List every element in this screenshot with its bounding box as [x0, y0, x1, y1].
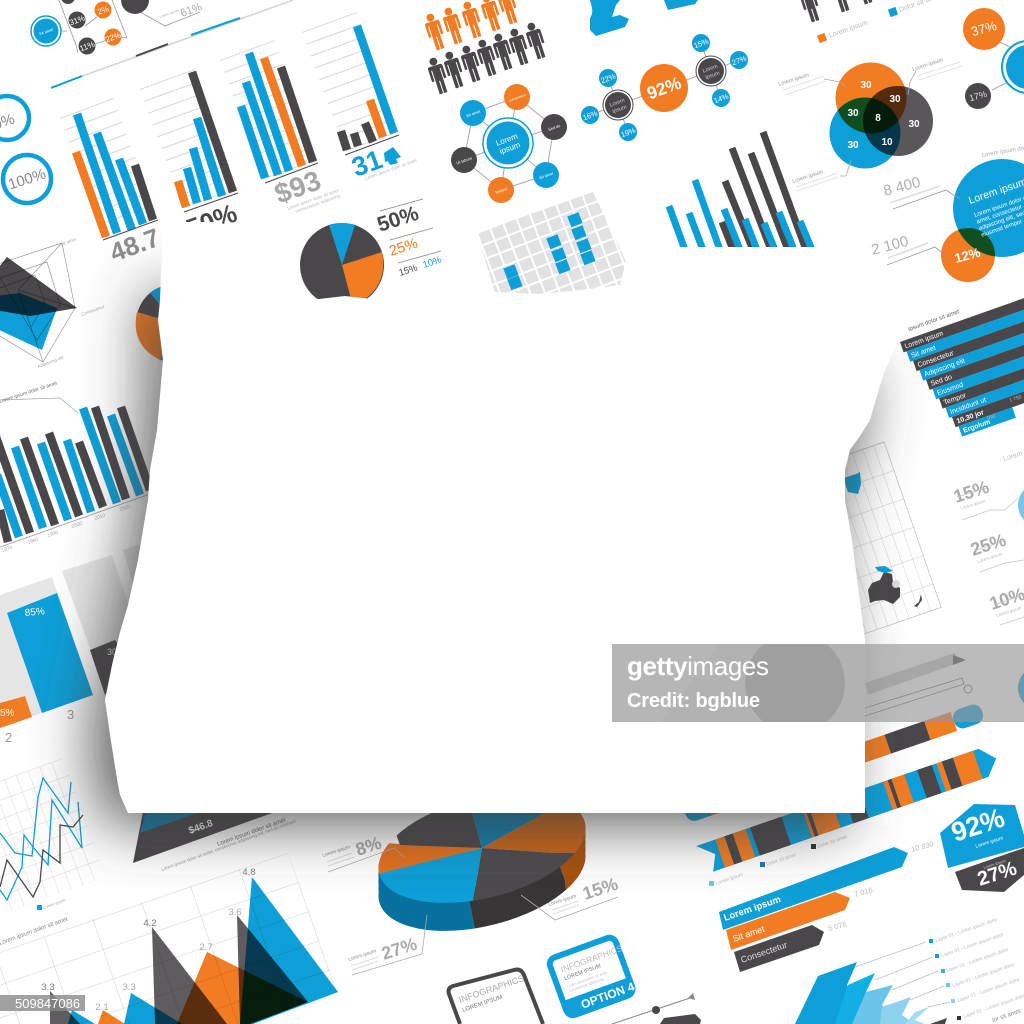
horizontal label bar list: Eiusmod: [936, 382, 964, 397]
partial pie on left: [136, 284, 214, 362]
horizontal label bar list: Adipiscing elit: [923, 358, 966, 379]
option 4 box: LOREM IPSUM: [563, 963, 602, 982]
top-right people and legend: Lorem ipsum: [828, 19, 869, 40]
horizontal label bar list: Sed do: [930, 374, 953, 388]
network diagram: Sit amet: [538, 170, 555, 180]
option 4 box: Lorem ipsum dolor sit amet: [567, 970, 608, 989]
network diagram: Sit amet: [465, 108, 482, 118]
bar chart $93: [220, 40, 341, 214]
big lorem ipsum circle with 8 400 and 2 100: 12%: [953, 245, 982, 266]
option 3 box: LOREM IPSUM: [462, 995, 503, 1014]
network diagram: consectetur: [508, 93, 527, 103]
top-left node diagram: 22%: [104, 31, 122, 44]
area triangle chart: 4.2: [143, 918, 157, 929]
arrow bars: Lorem ipsum: [722, 894, 782, 924]
getty images watermark: Credit: bgblue: [627, 690, 760, 712]
venn diagram: 30: [908, 119, 920, 130]
molecule diagram 92%: 15%: [693, 37, 710, 50]
option 4 box: consectetuer adipiscing: [568, 977, 604, 993]
horizontal label bar list: [900, 286, 1024, 446]
radar chart: [0, 236, 106, 369]
venn diagram: Lorem ipsum: [912, 57, 944, 73]
3D pie chart: Lorem ipsum: [322, 844, 351, 859]
venn diagram: [778, 57, 962, 191]
3D pie chart: [322, 813, 618, 976]
radar chart: Consectetur: [81, 304, 106, 317]
left timeline bar chart: 2010: [94, 513, 106, 522]
big lorem ipsum circle with 8 400 and 2 100: amet, consectetur: [976, 204, 1023, 226]
pie chart with percent legend: 15%: [398, 262, 420, 279]
option 4 box: INFOGRAPHICS: [559, 943, 624, 975]
left timeline bar chart: 2020: [119, 504, 131, 513]
big lorem ipsum circle with 8 400 and 2 100: [870, 143, 1024, 282]
option boxes: [448, 934, 701, 1024]
venn diagram: Lorem ipsum: [778, 72, 810, 88]
horizontal label bar list: Sit amet: [910, 345, 937, 360]
horizontal label bar list: Consectetur: [917, 350, 955, 369]
pie chart with percent legend: [300, 199, 444, 307]
venn diagram: 30: [847, 108, 859, 119]
area triangle chart: [0, 853, 338, 1024]
striped ribbon arrow: [696, 748, 996, 872]
3D pie chart: 15%: [580, 874, 621, 904]
left timeline bar chart: 1990: [47, 530, 59, 539]
hexagon badges: 27%: [975, 857, 1020, 891]
horizontal label bar list: 10,30 jor: [956, 409, 985, 425]
people pictogram: [422, 0, 549, 95]
molecule diagram 92%: ipsum: [612, 104, 628, 115]
waffle grid chart: [477, 192, 640, 310]
left percentage column chart: [0, 543, 170, 745]
progress ring 0%: [0, 96, 29, 140]
option 3 box: INFOGRAPHICS: [457, 973, 525, 1005]
left percentage column chart: 85%: [24, 606, 45, 619]
top-left node diagram: Lorem ipsum: [159, 8, 179, 19]
left timeline bar chart: [0, 380, 150, 554]
ribbon legend: Lorem ipsum: [715, 872, 744, 887]
stepped layered chart: Layer 01 - Lorem ipsum dolor: [935, 917, 999, 944]
striped upper band: [682, 702, 986, 823]
top-left node diagram: 2%: [96, 4, 110, 17]
venn diagram: 30: [889, 94, 901, 105]
pie chart with percent legend: 10%: [422, 254, 444, 271]
network diagram: [451, 84, 567, 203]
3D pie chart: Lorem ipsum: [348, 948, 377, 963]
hexagon badges: Lorem ipsum: [975, 835, 1004, 850]
network diagram: Ut labore: [456, 155, 473, 166]
left percentage column chart: 2: [5, 730, 12, 745]
3D pie chart: 8%: [353, 833, 384, 860]
left percentage column chart: 3: [67, 707, 74, 722]
center bar chart: [669, 132, 812, 250]
top-left node diagram: 11%: [78, 40, 96, 53]
molecule diagram 92%: 16%: [582, 109, 599, 122]
venn diagram: 30: [860, 80, 872, 91]
right side percentages: 15%: [951, 477, 992, 507]
bar chart percent: 50%: [182, 198, 241, 244]
horizontal label bar list: Tempor: [943, 392, 968, 407]
venn diagram: 8: [875, 113, 881, 124]
left timeline bar chart: Lorem ipsum dolor sit amet: [0, 380, 59, 405]
bar chart $93: $93: [270, 165, 325, 210]
dark banner under paper: $46.8: [187, 818, 215, 837]
molecule diagram 92%: 22%: [600, 72, 617, 85]
network diagram: Lorem: [495, 131, 519, 148]
left percentage column chart: 30: [107, 647, 117, 657]
venn diagram: 10: [881, 137, 893, 148]
hexagon badges: Lorem ipsum: [983, 858, 1007, 870]
molecule diagram 92%: 92%: [644, 72, 684, 103]
ribbon legend: Dolor sit amet: [766, 852, 797, 868]
molecule diagram 92%: 14%: [713, 92, 730, 105]
horizontal label bar list: 990: [987, 413, 997, 422]
arrow bars: 7 016: [853, 885, 874, 899]
top-right people and legend: [797, 0, 941, 43]
bar chart 48.7: [60, 98, 164, 268]
line chart: Lorem ipsum dolor sit amet: [0, 916, 69, 947]
option 4 box: OPTION 4: [579, 979, 637, 1012]
arrow bars: Sit amet: [731, 924, 766, 944]
horizontal label bar list: Incididunt ut: [949, 397, 987, 416]
right side percentages: Lorem ipsum: [960, 498, 986, 511]
venn diagram: 30: [847, 140, 859, 151]
left timeline bar chart: 2000: [71, 521, 83, 530]
right side percentages: [951, 449, 1024, 625]
molecule diagram 92%: 19%: [620, 126, 637, 139]
horizontal label bar list: Ergolum: [962, 419, 991, 435]
arrow bars: 5 076: [827, 919, 848, 933]
molecule diagram 92%: ipsum: [705, 70, 721, 81]
stepped layered chart: Layer 01 - Lorem ipsum dolor: [946, 947, 1010, 974]
right side percentages: Lorem ipsum: [977, 551, 1003, 564]
right side percentages: Lorem ipsum: [996, 605, 1022, 618]
progress ring 100%: 100%: [6, 165, 48, 193]
right side percentages: 25%: [968, 530, 1009, 560]
torn white paper: [105, 222, 905, 813]
area triangle chart: 2.7: [199, 942, 213, 953]
top icons: [590, 0, 698, 36]
timeline arrow: [612, 993, 701, 1024]
area triangle chart: 2.1: [95, 1002, 109, 1013]
left percentage column chart: 5%: [0, 708, 15, 719]
big lorem ipsum circle with 8 400 and 2 100: 8 400: [882, 174, 922, 200]
molecule diagram 92%: Lorem: [609, 97, 626, 109]
getty images watermark: gettyimages: [627, 651, 769, 681]
connected circles top-right: 17%: [968, 89, 988, 103]
hexagon badges: [940, 802, 1024, 892]
line chart: Lorem ipsum: [43, 897, 67, 910]
progress ring 100%: [3, 155, 51, 203]
big lorem ipsum circle with 8 400 and 2 100: eiusmod tempor: [981, 219, 1023, 239]
radar chart: Adipiscing elit: [37, 355, 65, 369]
bar chart 31 with arrow: 31: [348, 144, 386, 183]
stepped layered chart: Layer 01 - Lorem ipsum dolor: [957, 977, 1021, 1004]
big lorem ipsum circle with 8 400 and 2 100: 2 100: [870, 233, 910, 259]
sliders under watermark: [865, 653, 1024, 716]
pie chart with percent legend: 25%: [387, 236, 420, 260]
option 3 box: [448, 970, 543, 1024]
area triangle chart: 3.6: [228, 907, 242, 918]
world map grid: [786, 442, 941, 641]
bar chart $93: consectetuer adipiscing: [295, 193, 341, 214]
horizontal label bar list: Lorem ipsum: [904, 330, 944, 350]
bar chart percent: [140, 69, 241, 244]
area triangle chart: 3.3: [122, 982, 136, 993]
ribbon legend: [709, 834, 848, 887]
stepped layered chart: [795, 917, 1024, 1024]
bar chart $93: Lorem ipsum dolor sit amet: [287, 187, 340, 211]
bar chart 48.7: 48.7: [106, 222, 164, 268]
top-left node diagram: [31, 0, 204, 54]
dark banner under paper: Lorem ipsum dolor sit amet: [217, 817, 287, 848]
option 4 box: [548, 934, 639, 1020]
image id tag: 509847086: [15, 996, 80, 1011]
top-left node diagram: 61%: [179, 1, 204, 20]
paper shadow: [89, 281, 869, 826]
area triangle chart: 4.8: [242, 867, 256, 878]
network diagram: Sed do: [547, 123, 562, 132]
pie chart with percent legend: 50%: [374, 202, 422, 237]
dark banner under paper: Lorem ipsum dolor sit amet, consectetur adipiscing elit, sed do eiusmod: [161, 818, 297, 872]
left timeline bar chart: 1970: [1, 545, 13, 554]
horizontal label bar list: 1 750: [1009, 394, 1023, 404]
venn diagram: Lorem ipsum: [792, 169, 824, 185]
getty images watermark: [612, 644, 1024, 722]
connected circles top-right: 37%: [969, 18, 999, 39]
stepped layered chart: Layer 01 - Lorem ipsum dolor: [941, 932, 1005, 959]
molecule diagram 92%: [581, 34, 748, 141]
molecule diagram 92%: 27%: [731, 54, 748, 67]
top-left node diagram: 31%: [68, 14, 86, 27]
ribbon legend: Dolor sit amet: [817, 834, 848, 850]
arrow bars: 10 830: [910, 839, 935, 854]
3D pie chart: Lorem ipsum: [548, 893, 577, 908]
3D pie chart: 27%: [379, 934, 420, 964]
stepped layered chart: lor sit amet: [992, 1009, 1022, 1024]
top-left node diagram: 54 amet: [39, 26, 55, 36]
bar chart 31 with arrow: Lorem ipsum dolor sit amet: [365, 157, 418, 181]
arrow bars: [719, 839, 935, 972]
connected circles top-right: [963, 8, 1024, 109]
network diagram: Tempor: [494, 186, 509, 195]
left timeline bar chart: 1980: [27, 537, 39, 546]
stepped layered chart: Layer 01 - Lorem ipsum dolor: [952, 962, 1016, 989]
radar chart: Sit amet: [60, 236, 78, 247]
line chart: [0, 758, 106, 947]
timeline: [51, 0, 293, 88]
area triangle chart: 3.3: [41, 982, 55, 993]
network diagram: ipsum: [498, 140, 522, 156]
horizontal label bar list: ipsum dolor sit amet: [908, 309, 961, 333]
arrow bars: Consectetur: [739, 940, 789, 965]
bar chart 31 with arrow: [302, 12, 418, 183]
molecule diagram 92%: Lorem: [702, 63, 719, 75]
hexagon badges: 92%: [948, 802, 1008, 848]
